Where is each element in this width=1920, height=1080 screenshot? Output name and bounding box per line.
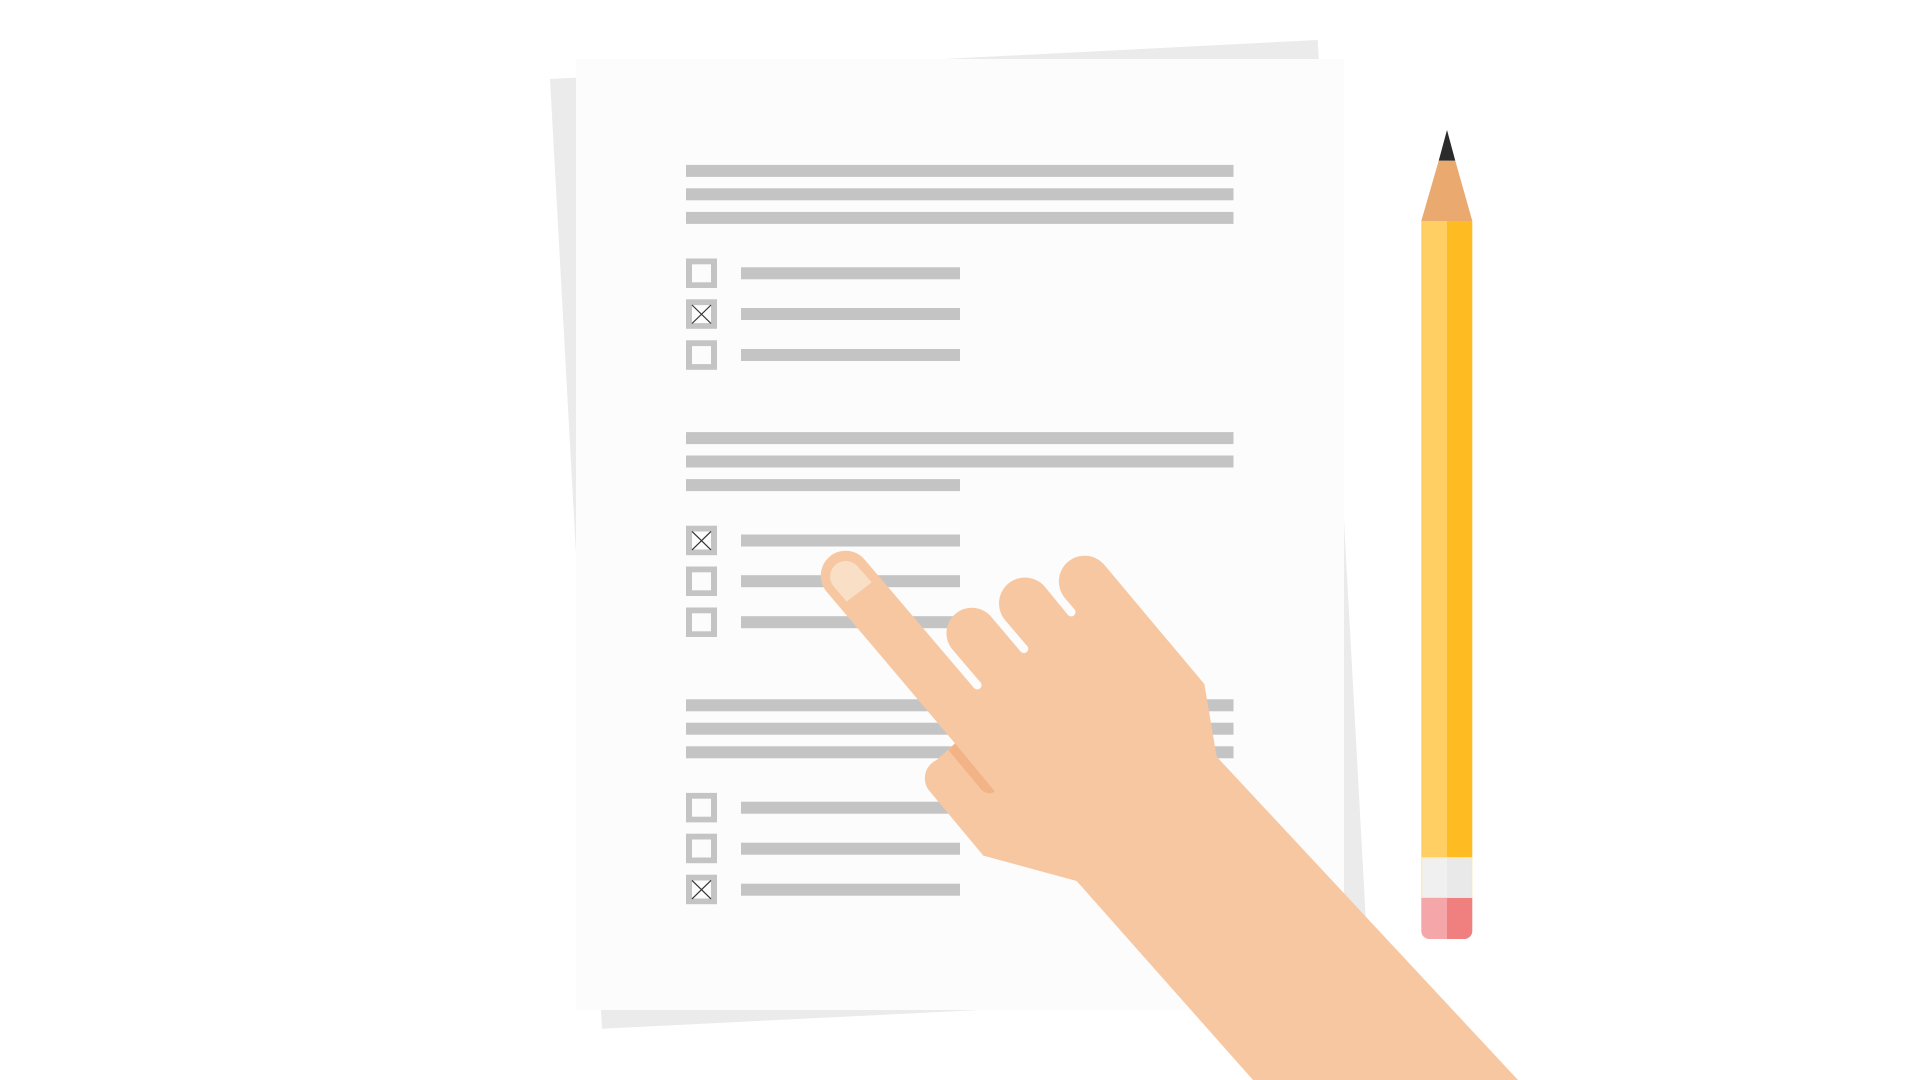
option line: [741, 575, 960, 587]
option: empty checkbox: [686, 566, 717, 596]
option: crossed checkbox: [686, 526, 717, 555]
option line: [741, 843, 960, 855]
front paper sheet: [576, 59, 1344, 1010]
question 3 group: [686, 699, 1234, 904]
question 2 text lines: [686, 432, 1234, 491]
option line: [741, 267, 960, 279]
thumb crease: [948, 743, 995, 793]
question 1 group: [686, 165, 1234, 370]
icon: pointing hand: [821, 551, 1518, 1080]
pencil eraser: [1421, 898, 1472, 939]
question 2 group: [686, 432, 1234, 637]
option: empty checkbox: [686, 258, 717, 288]
pencil ferrule: [1421, 857, 1472, 898]
option: crossed checkbox: [686, 299, 717, 329]
option: empty checkbox: [686, 608, 717, 637]
option: empty checkbox: [686, 340, 717, 370]
pencil wood cone: [1421, 161, 1472, 221]
option: empty checkbox: [686, 834, 717, 863]
rear paper sheet: [550, 40, 1370, 1029]
icon: pencil: [1421, 130, 1472, 939]
option: crossed checkbox: [686, 875, 717, 904]
pencil graphite tip: [1439, 130, 1455, 161]
hand silhouette: [821, 551, 1518, 1080]
pencil body: [1421, 221, 1472, 857]
option: empty checkbox: [686, 793, 717, 822]
fingernail: [830, 561, 872, 602]
option line: [741, 802, 960, 814]
question 3 text lines: [686, 699, 1234, 758]
option line: [741, 884, 960, 896]
option line: [741, 616, 960, 628]
option line: [741, 308, 960, 320]
question 1 text lines: [686, 165, 1234, 224]
option line: [741, 349, 960, 361]
option line: [741, 534, 960, 546]
